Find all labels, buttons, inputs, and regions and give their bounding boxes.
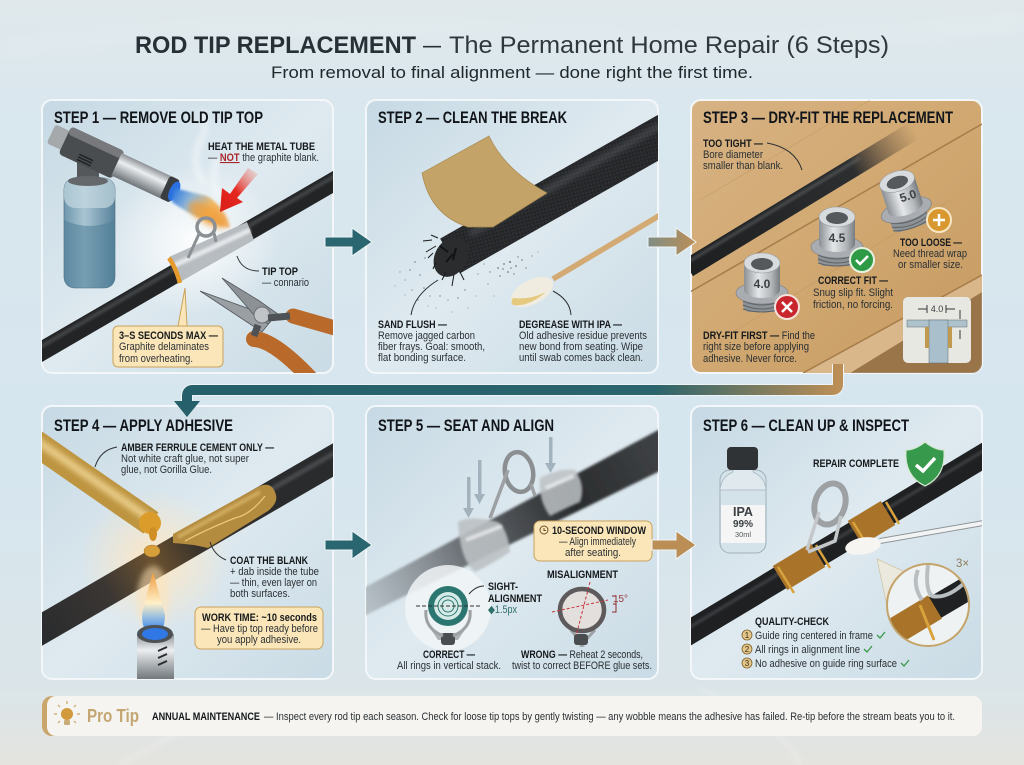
callout: 3-5 seconds max: 3–S SECONDS MAX —	[119, 330, 218, 342]
icon: tip top size 4.5	[811, 207, 874, 272]
callout: degrease with IPA: new bond from seating. Wipe	[519, 341, 643, 353]
step title: STEP 3 — DRY-FIT THE REPLACEMENT	[703, 109, 953, 127]
icon: tip top size 4.0: 4.0	[754, 277, 771, 291]
callout: coat the blank: — thin, even layer on	[230, 577, 317, 589]
carbon rod with frayed end	[423, 120, 670, 286]
callout: 10-second window: 10-SECOND WINDOW	[552, 525, 647, 537]
callout: heat the metal tube: HEAT THE METAL TUBE	[208, 141, 315, 153]
title: ROD TIP REPLACEMENT	[135, 32, 416, 59]
rod with adhesive coat	[30, 447, 345, 636]
callout: correct fit	[813, 275, 893, 311]
arrow: step 4 to step 5	[325, 531, 372, 559]
callout: heat the metal tube: — NOT the graphite blank.	[208, 152, 319, 164]
magnified detail	[880, 564, 975, 646]
callout: too loose: or smaller size.	[898, 259, 963, 271]
rod with guide ferrules	[360, 428, 662, 618]
callout: tip top: — connario	[262, 277, 309, 289]
callout: sand flush	[378, 280, 485, 364]
quality-check list: Guide ring centered in frame	[755, 630, 873, 642]
caption: wrong: twist to correct BEFORE glue sets.	[512, 660, 652, 672]
callout: too loose: Need thread wrap	[893, 248, 967, 260]
bottle label: 99%	[733, 518, 754, 530]
callout: too loose: TOO LOOSE —	[900, 237, 962, 249]
callout: tip top: TIP TOP	[262, 266, 298, 278]
correct alignment inset	[405, 565, 491, 651]
callout: degrease with IPA: DEGREASE WITH IPA —	[519, 319, 622, 331]
caption: wrong	[512, 649, 652, 672]
icon: pliers	[200, 278, 335, 378]
callout: work time: — Have tip top ready before	[201, 623, 318, 635]
callout: too tight: Bore diameter	[703, 149, 763, 161]
label: misalignment: MISALIGNMENT	[547, 569, 618, 581]
callout: work time: you apply adhesive.	[217, 634, 301, 646]
quality-check list: 3	[745, 659, 750, 668]
rod with amber wraps	[680, 444, 995, 638]
label: sight-alignment: SIGHT-	[488, 581, 518, 593]
carbon dust particles	[394, 252, 538, 312]
label: sight-alignment	[488, 581, 542, 616]
callout: dry-fit first: DRY-FIT FIRST — Find the	[703, 330, 815, 342]
callout: heat the metal tube	[208, 141, 319, 164]
icon: butane torch canister	[64, 160, 115, 288]
callout: degrease with IPA	[519, 291, 647, 364]
callout: tip top	[237, 256, 309, 289]
pro tip heading: Pro Tip	[87, 706, 139, 726]
callout: 10-second window	[534, 521, 652, 561]
quality-check list: 1	[745, 631, 750, 640]
callout: 3-5 seconds max: Graphite delaminates	[119, 341, 209, 353]
panel: pro tip	[42, 696, 982, 736]
inset: bore cross-section: 4.0	[931, 304, 943, 314]
callout: sand flush: Remove jagged carbon	[378, 330, 475, 342]
icon: light bulb	[54, 701, 80, 725]
caption: correct: CORRECT —	[423, 649, 475, 661]
step title: STEP 6 — CLEAN UP & INSPECT	[703, 417, 909, 435]
icon: tip top size 5.0: 5.0	[898, 187, 918, 205]
step title: STEP 5 — SEAT AND ALIGN	[378, 417, 554, 435]
caption: correct	[397, 649, 501, 672]
step title: STEP 4 — APPLY ADHESIVE	[54, 417, 233, 435]
rod	[30, 170, 345, 358]
smoke	[196, 110, 218, 196]
icon: tip top size 4.5: 4.5	[829, 231, 846, 245]
bottle label: IPA	[733, 504, 754, 519]
label: sight-alignment: ALIGNMENT	[488, 593, 542, 605]
icon: green shield	[906, 442, 944, 486]
inset: bore cross-section	[903, 297, 971, 363]
label: sight-alignment: ◆1.5px	[488, 604, 517, 616]
callout: dry-fit first: adhesive. Never force.	[703, 353, 797, 365]
callout: coat the blank: COAT THE BLANK	[230, 555, 308, 567]
caption: wrong: WRONG — Reheat 2 seconds,	[521, 649, 643, 661]
icon: IPA bottle	[720, 447, 766, 553]
title	[135, 32, 889, 59]
callout: degrease with IPA: Old adhesive residue prevents	[519, 330, 647, 342]
callout: amber ferrule cement: glue, not Gorilla Glue.	[121, 464, 212, 476]
callout: sand flush: flat bonding surface.	[378, 352, 466, 364]
callout: coat the blank: both surfaces.	[230, 588, 290, 600]
magnifier pointer	[876, 558, 904, 604]
callout: 10-second window: — Align immediately	[559, 536, 636, 548]
callout: coat the blank: + dab inside the tube	[230, 566, 319, 578]
callout: dry-fit first: right size before applying	[703, 341, 809, 353]
bottle label	[733, 507, 753, 537]
callout: too tight: TOO TIGHT —	[703, 138, 763, 150]
rod on wood	[688, 130, 915, 268]
icon: tip top size 5.0	[869, 164, 951, 236]
label: repair complete: REPAIR COMPLETE	[813, 458, 899, 470]
arrow: step 2 to step 3	[648, 228, 696, 256]
callout: sand flush: fiber frays. Goal: smooth,	[378, 341, 485, 353]
callout: 3-5 seconds max	[113, 288, 223, 367]
tip top ferrule	[169, 218, 254, 283]
icon: adhesive stick	[30, 436, 161, 541]
quality-check list: All rings in alignment line	[755, 644, 860, 656]
callout: amber ferrule cement: Not white craft glue, not super	[121, 453, 249, 465]
subtitle: From removal to final alignment — done right the first time.	[271, 64, 753, 82]
callout: work time: WORK TIME: ~10 seconds	[202, 612, 317, 624]
label: 3x magnification: 3×	[956, 556, 969, 570]
callout: coat the blank	[210, 542, 319, 600]
callout: correct fit: CORRECT FIT —	[818, 275, 888, 287]
callout: 3-5 seconds max: from overheating.	[119, 353, 193, 365]
callout: correct fit: friction, no forcing.	[813, 299, 893, 311]
icon: tip top size 4.0	[736, 253, 799, 319]
callout: too tight	[703, 138, 802, 172]
pro tip text: ANNUAL MAINTENANCE	[152, 711, 260, 723]
icon: burner flame	[137, 566, 174, 680]
panel: step 4 apply adhesive	[30, 406, 345, 680]
panel: step 6 clean up and inspect	[680, 406, 995, 679]
callout: work time	[195, 607, 323, 649]
label: 15 degrees: 15°	[613, 594, 628, 605]
icon: flame	[172, 188, 232, 234]
callout: 10-second window: after seating.	[565, 547, 621, 559]
panel: step 5 seat and align	[360, 406, 662, 679]
quality-check list: QUALITY-CHECK	[755, 616, 829, 628]
icon: cotton swab	[845, 520, 982, 555]
callout: amber ferrule cement: AMBER FERRULE CEMENT ONLY —	[121, 442, 274, 454]
arrow: step 5 to step 6	[652, 531, 696, 559]
title: —	[423, 32, 441, 59]
bottle label: 30ml	[735, 530, 751, 539]
callout: dry-fit first	[703, 330, 815, 365]
panel: step 2 clean the break	[366, 100, 670, 373]
icon: sandpaper	[422, 136, 547, 227]
icon: cotton swab	[511, 213, 658, 307]
caption: correct: All rings in vertical stack.	[397, 660, 501, 672]
step title: STEP 1 — REMOVE OLD TIP TOP	[54, 109, 263, 127]
quality-check list	[742, 616, 909, 670]
callout: too tight: smaller than blank.	[703, 160, 783, 172]
callout: too loose	[893, 237, 967, 271]
panel: step 1 remove old tip top	[30, 100, 345, 378]
callout: sand flush: SAND FLUSH —	[378, 319, 447, 331]
quality-check list: 2	[745, 645, 750, 654]
title: The Permanent Home Repair (6 Steps)	[449, 32, 889, 59]
arrow: step 1 to step 2	[325, 228, 372, 256]
icon: torch head	[48, 125, 180, 202]
seating arrows	[463, 437, 556, 518]
step title: STEP 2 — CLEAN THE BREAK	[378, 109, 567, 127]
icon: red arrow	[220, 168, 258, 212]
wood planks	[690, 100, 982, 373]
callout: correct fit: Snug slip fit. Slight	[813, 287, 893, 299]
panel: step 3 dry-fit the replacement	[688, 100, 982, 373]
misaligned guide ring diagram	[552, 582, 616, 645]
callout: degrease with IPA: until swab comes back clean.	[519, 352, 643, 364]
arrow: step 3 to step 4 connector	[174, 364, 838, 417]
quality-check list: No adhesive on guide ring surface	[755, 658, 897, 670]
callout: amber ferrule cement	[95, 442, 274, 476]
